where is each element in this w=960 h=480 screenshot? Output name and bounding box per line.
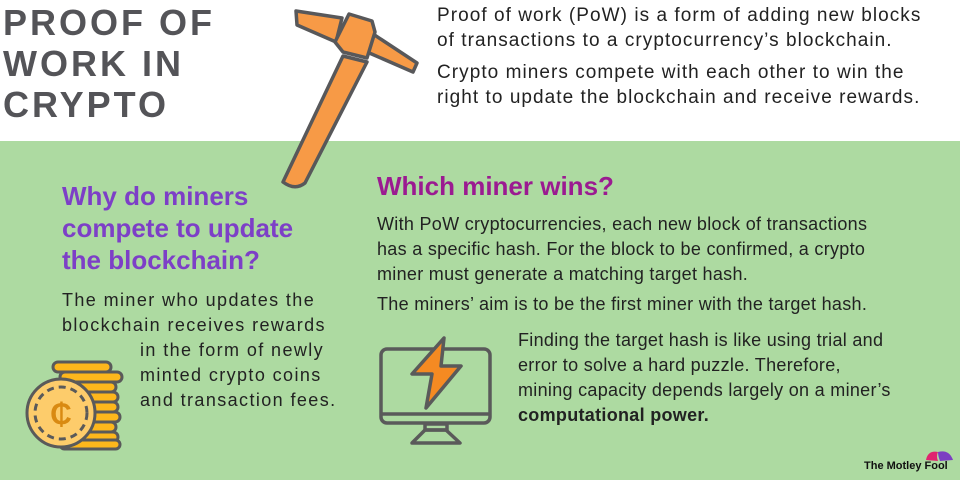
icon: pickaxe [281, 9, 419, 188]
title: CRYPTO [3, 84, 169, 125]
heading: which miner wins: Which miner wins? [377, 171, 614, 201]
text: computational power: error to solve a hard puzzle. Therefore, [518, 355, 841, 375]
icon: coin stack: ₵ [50, 398, 72, 431]
text: rewards: blockchain receives rewards [62, 315, 326, 335]
intro text [437, 5, 921, 108]
title: WORK IN [3, 43, 184, 84]
text: rewards: and transaction fees. [140, 390, 337, 410]
icon: jester hat [926, 451, 953, 461]
text: which miner wins body [377, 214, 867, 314]
text: computational power: mining capacity depends largely on a miner’s [518, 380, 891, 400]
intro text: Crypto miners compete with each other to win the [437, 62, 905, 83]
logo: The Motley Fool: The Motley Fool [864, 460, 948, 472]
text: rewards [62, 290, 337, 410]
text: which miner wins body: has a specific hash. For the block to be confirmed, a crypto [377, 239, 865, 259]
icon: coin stack [26, 360, 124, 450]
text: rewards: The miner who updates the [62, 290, 315, 310]
intro text: of transactions to a cryptocurrency’s blockchain. [437, 30, 893, 51]
title [3, 2, 215, 125]
text: computational power: Finding the target hash is like using trial and [518, 330, 883, 350]
text: which miner wins body: miner must generate a matching target hash. [377, 264, 748, 284]
heading: why do miners compete: the blockchain? [62, 245, 260, 275]
heading: why do miners compete: compete to update [62, 213, 293, 243]
icon: monitor with lightning [379, 336, 492, 445]
text: rewards: minted crypto coins [140, 365, 322, 385]
heading: why do miners compete: Why do miners [62, 181, 248, 211]
text: which miner wins body: The miners’ aim is to be the first miner with the target hash. [377, 294, 867, 314]
intro text: Proof of work (PoW) is a form of adding new blocks [437, 5, 921, 26]
text: which miner wins body: With PoW cryptocurrencies, each new block of transactions [377, 214, 867, 234]
intro text: right to update the blockchain and receive rewards. [437, 87, 920, 108]
text: computational power: computational power. [518, 405, 709, 425]
heading: why do miners compete [62, 181, 293, 275]
text: computational power [518, 330, 891, 425]
text: rewards: in the form of newly [140, 340, 324, 360]
title: PROOF OF [3, 2, 215, 43]
